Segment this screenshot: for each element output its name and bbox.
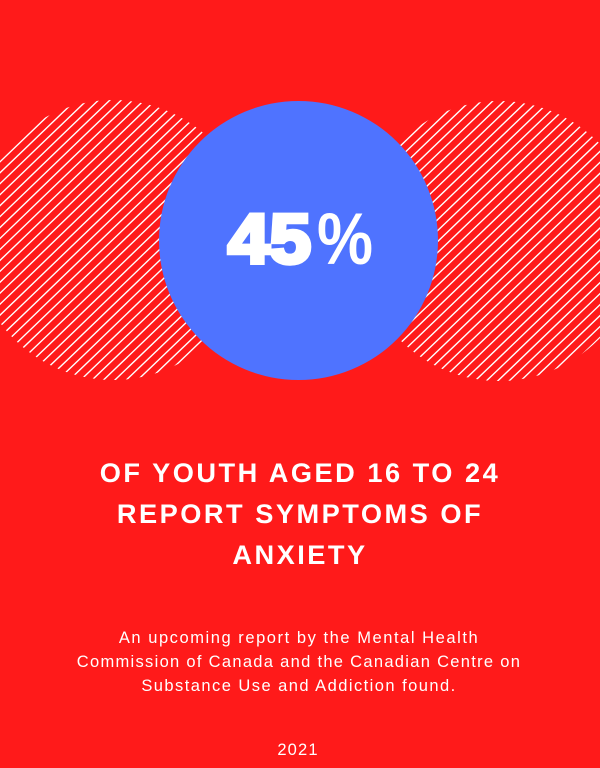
year: 2021 [277,741,319,759]
heading: ANXIETY [232,539,368,570]
description: Commission of Canada and the Canadian Centre on [77,653,521,671]
description: Substance Use and Addiction found. [141,677,457,695]
right hatched circle [371,151,586,375]
big percentage: % [317,199,373,280]
big percentage [228,199,373,280]
circles graphic [0,100,600,381]
big percentage: 45 [228,200,311,278]
description: An upcoming report by the Mental Health [119,629,479,647]
heading [100,457,500,570]
heading: REPORT SYMPTOMS OF [117,498,483,529]
heading: OF YOUTH AGED 16 TO 24 [100,457,500,488]
blue circle [159,101,438,380]
left hatched circle [8,131,223,355]
description [77,629,521,695]
